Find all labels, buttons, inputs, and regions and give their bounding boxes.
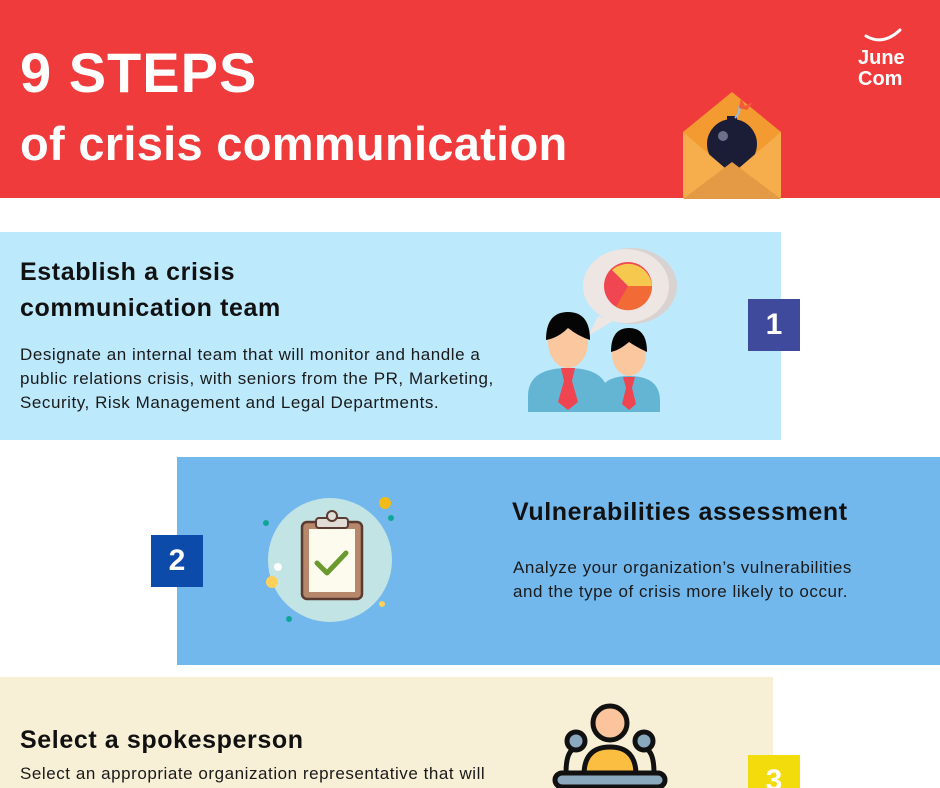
text 2 xyxy=(513,558,852,601)
text 1: public relations crisis, with seniors from the PR, Marketing, xyxy=(20,369,494,388)
heading 1: communication team xyxy=(20,294,281,322)
badge 2 xyxy=(151,535,203,587)
text 3: Select an appropriate organization representative that will xyxy=(20,764,485,783)
icon: clipboard xyxy=(263,497,394,622)
panel: step 1 xyxy=(0,232,781,440)
title: 9 STEPS xyxy=(20,41,257,104)
heading 1: Establish a crisis xyxy=(20,258,235,286)
text 1: Security, Risk Management and Legal Departments. xyxy=(20,393,439,412)
heading 2: Vulnerabilities assessment xyxy=(512,498,848,526)
badge 1: 1 xyxy=(766,308,782,341)
badge 3 xyxy=(748,755,800,788)
subtitle: of crisis communication xyxy=(20,117,568,170)
icon: spokesperson xyxy=(552,704,668,788)
heading 1 xyxy=(20,258,281,322)
logo: June xyxy=(858,47,905,69)
badge 2: 2 xyxy=(169,544,185,577)
logo xyxy=(858,28,905,90)
logo: Com xyxy=(858,68,902,90)
icon: team xyxy=(528,248,677,412)
icon: envelope with bomb xyxy=(683,92,781,199)
badge 1 xyxy=(748,299,800,351)
panel: step 3 xyxy=(0,677,773,788)
text 1: Designate an internal team that will monitor and handle a xyxy=(20,345,480,364)
header banner xyxy=(0,0,940,198)
text 1 xyxy=(20,345,494,412)
panel: step 2 xyxy=(177,457,940,665)
text 2: and the type of crisis more likely to occur. xyxy=(513,582,848,601)
heading 3: Select a spokesperson xyxy=(20,726,304,754)
text 2: Analyze your organization’s vulnerabilities xyxy=(513,558,852,577)
